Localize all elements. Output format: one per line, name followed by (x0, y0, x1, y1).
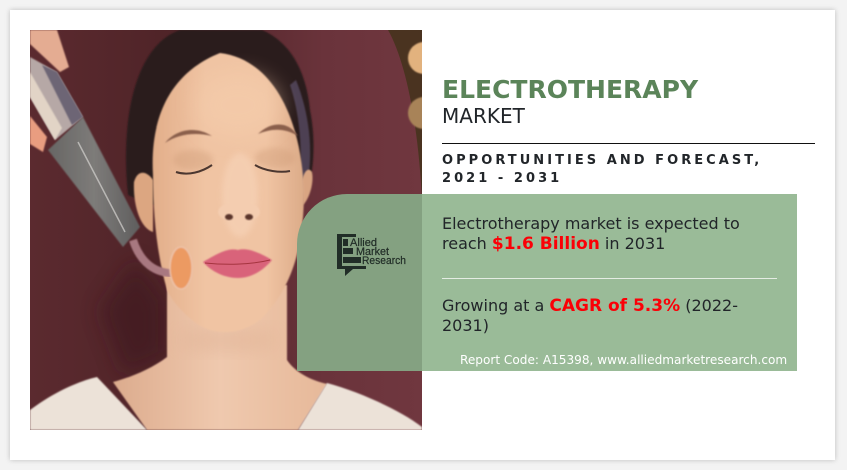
ears (134, 173, 153, 232)
CAGR statement (442, 296, 738, 335)
green overlay on photo (297, 194, 422, 371)
market size statement (442, 214, 740, 254)
nose (218, 202, 260, 222)
hair (126, 30, 314, 205)
CAGR statement: Growing at a CAGR of 5.3% (2022- (442, 296, 738, 316)
logo wordmark: Research (362, 255, 406, 267)
brows (165, 130, 212, 143)
subtitle: MARKET (442, 104, 525, 128)
backdrop (30, 30, 422, 430)
title: ELECTROTHERAPY (442, 75, 698, 104)
face (153, 53, 304, 332)
towel left (30, 377, 147, 430)
report code: Report Code: A15398, www.alliedmarketresearch.com (460, 353, 787, 367)
towel right (298, 383, 422, 430)
device: silver barrel (30, 57, 83, 140)
logo wordmark: Allied (350, 237, 377, 249)
CAGR statement: 2031) (442, 316, 489, 335)
logo wordmark (350, 237, 406, 267)
device: gray cone (48, 117, 140, 247)
neck and chest (113, 285, 327, 430)
market size statement: Electrotherapy market is expected to (442, 214, 740, 233)
market size statement: reach $1.6 Billion in 2031 (442, 234, 665, 254)
logo wordmark: Market (356, 246, 389, 258)
device: orange disc (170, 247, 192, 289)
forecast heading: 2021 - 2031 (442, 170, 562, 186)
closed eyes (176, 165, 212, 174)
logo mark (337, 234, 366, 276)
device: glass neck (133, 240, 178, 273)
forecast heading (442, 153, 762, 186)
forecast heading: OPPORTUNITIES AND FORECAST, (442, 153, 762, 168)
green panel (422, 194, 797, 371)
divider (442, 143, 815, 144)
lips (203, 249, 272, 278)
fingers (30, 30, 69, 72)
photo: woman receiving electrotherapy facial (30, 30, 422, 430)
logo: Allied Market Research (337, 234, 406, 276)
panel divider (442, 278, 777, 279)
